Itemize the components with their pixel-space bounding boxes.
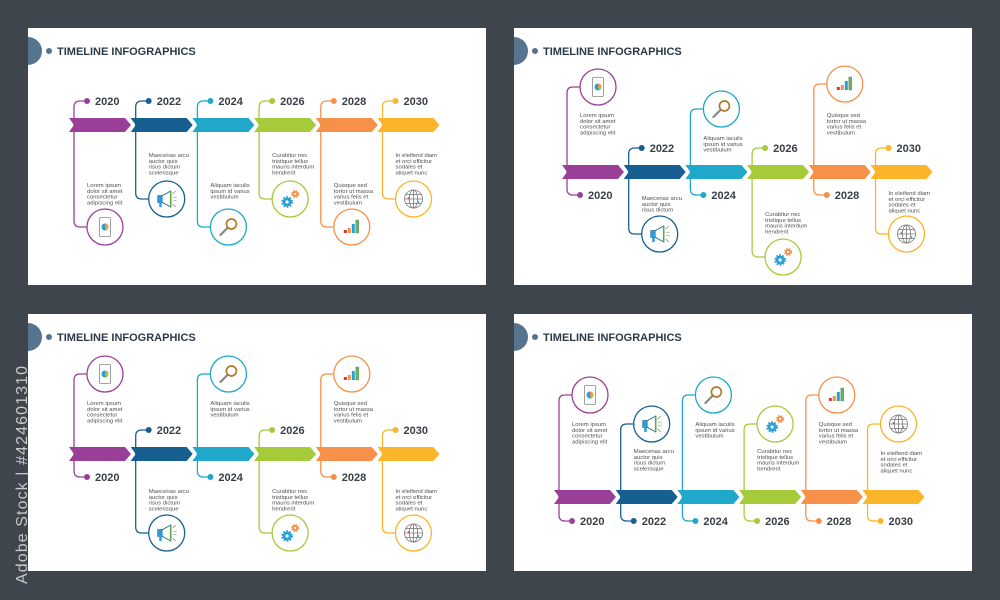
panel 1: all years above — [28, 28, 486, 285]
item 2022: Maecenas arcu — [149, 489, 189, 495]
item 2030: sodales et — [880, 463, 908, 469]
item 2022 — [616, 406, 678, 528]
item 2020: 2020 — [580, 516, 604, 528]
item 2030 — [870, 143, 932, 252]
item 2020: consectetur — [572, 434, 602, 440]
item 2028: varius felis et — [819, 434, 854, 440]
item 2028: vestibulum — [827, 130, 855, 136]
item 2030: aliquet nunc — [396, 170, 427, 176]
item 2022: auctor quis — [149, 495, 178, 501]
item 2028: vestibulum — [334, 418, 362, 424]
item 2020: Lorem ipsum — [580, 113, 614, 119]
item 2030: In eleifend diam — [880, 451, 922, 457]
item 2026: mauris interdum — [272, 165, 314, 171]
item 2024 — [677, 377, 739, 528]
item 2024: Aliquam iaculis — [703, 136, 743, 142]
item 2024: vestibulum — [695, 434, 724, 440]
item 2026 — [254, 425, 316, 551]
watermark: vertical stock id: Adobe Stock | #424601310 — [14, 366, 31, 584]
item 2022: scelerisque — [149, 506, 179, 512]
item 2028: tortor ut massa — [827, 119, 867, 125]
item 2022: auctor quis — [634, 455, 663, 461]
header 3: TIMELINE INFOGRAPHICS — [57, 332, 196, 344]
item 2020 — [562, 69, 624, 202]
item 2030: In eleifend diam — [888, 191, 930, 197]
item 2028: Quisque sed — [334, 183, 367, 189]
item 2022: 2022 — [157, 96, 181, 108]
panel 4: all years below — [514, 314, 972, 571]
item 2020: Lorem ipsum — [87, 401, 121, 407]
item 2026: hendrerit — [765, 229, 789, 235]
item 2022: risus dictum — [149, 501, 180, 507]
item 2030: sodales et — [396, 165, 423, 171]
item 2022 — [624, 143, 686, 252]
panel 3: alternating, aligned circles — [28, 314, 486, 571]
item 2026: tristique tellus — [757, 455, 793, 461]
item 2020: adipiscing elit — [87, 418, 123, 424]
item 2020: consectetur — [87, 413, 117, 419]
item 2026: Curabitur nec — [272, 153, 308, 159]
item 2020: consectetur — [87, 195, 117, 201]
item 2028 — [809, 66, 871, 202]
item 2028: vestibulum — [334, 200, 362, 206]
item 2026: mauris interdum — [272, 501, 314, 507]
item 2022: scelerisque — [634, 466, 664, 472]
item 2028: vestibulum — [819, 439, 847, 445]
item 2030: 2030 — [896, 143, 921, 155]
header 3 — [28, 323, 196, 351]
item 2028: 2028 — [827, 516, 851, 528]
item 2020: Lorem ipsum — [572, 422, 606, 428]
item 2024 — [192, 96, 254, 245]
item 2030: et orci efficitur — [396, 495, 432, 501]
item 2024: 2024 — [218, 96, 244, 108]
item 2022: 2022 — [157, 425, 181, 437]
item 2028: tortor ut massa — [334, 407, 374, 413]
header 4: TIMELINE INFOGRAPHICS — [543, 332, 682, 344]
item 2024: ipsum id varius — [695, 428, 735, 434]
item 2030: et orci efficitur — [880, 457, 917, 463]
item 2024: ipsum id varius — [210, 189, 250, 195]
header 2: TIMELINE INFOGRAPHICS — [543, 46, 682, 58]
item 2030: 2030 — [404, 425, 428, 437]
item 2020: adipiscing elit — [580, 130, 616, 136]
item 2024: ipsum id varius — [703, 142, 743, 148]
item 2024: vestibulum — [210, 195, 239, 201]
item 2026: Curabitur nec — [272, 489, 308, 495]
item 2026: mauris interdum — [765, 224, 807, 230]
item 2020: adipiscing elit — [87, 200, 123, 206]
item 2024: 2024 — [703, 516, 729, 528]
item 2026: hendrerit — [272, 170, 296, 176]
header 4 — [514, 323, 682, 351]
item 2028: 2028 — [342, 472, 366, 484]
item 2020: consectetur — [580, 125, 610, 131]
item 2030 — [378, 425, 440, 551]
item 2022: risus dictum — [634, 461, 665, 467]
item 2026: hendrerit — [272, 506, 296, 512]
item 2028 — [316, 356, 378, 484]
item 2030: In eleifend diam — [396, 489, 437, 495]
item 2026: Curabitur nec — [765, 212, 801, 218]
item 2022: Maecenas arcu — [149, 153, 189, 159]
item 2030: 2030 — [404, 96, 428, 108]
item 2020 — [554, 377, 616, 528]
item 2020: 2020 — [95, 472, 119, 484]
item 2028: tortor ut massa — [334, 189, 374, 195]
item 2028: Quisque sed — [819, 422, 852, 428]
item 2024: ipsum id varius — [210, 407, 250, 413]
item 2026: 2026 — [773, 143, 798, 155]
item 2020 — [69, 96, 131, 245]
item 2026: tristique tellus — [765, 218, 801, 224]
item 2020: 2020 — [588, 190, 612, 202]
panel 2: alternating, staggered circles — [514, 28, 972, 285]
item 2026 — [747, 143, 809, 275]
item 2030: aliquet nunc — [888, 208, 920, 214]
item 2026: tristique tellus — [272, 159, 308, 165]
item 2024: Aliquam iaculis — [695, 422, 735, 428]
item 2030: aliquet nunc — [880, 468, 912, 474]
item 2028: tortor ut massa — [819, 428, 859, 434]
item 2030 — [378, 96, 440, 217]
item 2026 — [739, 406, 801, 528]
item 2022: risus dictum — [149, 165, 180, 171]
item 2028: Quisque sed — [827, 113, 860, 119]
item 2022: Maecenas arcu — [634, 449, 674, 455]
item 2026: Curabitur nec — [757, 449, 793, 455]
item 2024 — [192, 356, 254, 484]
item 2028: varius felis et — [827, 125, 862, 131]
item 2020: dolor sit amet — [572, 428, 608, 434]
item 2022 — [131, 96, 193, 217]
item 2030: sodales et — [888, 203, 916, 209]
item 2026: hendrerit — [757, 466, 781, 472]
item 2026: mauris interdum — [757, 461, 799, 467]
item 2028: 2028 — [342, 96, 366, 108]
item 2022 — [131, 425, 193, 551]
item 2022: scelerisque — [149, 170, 179, 176]
item 2028: 2028 — [835, 190, 859, 202]
item 2024: vestibulum — [210, 413, 239, 419]
item 2020: adipiscing elit — [572, 439, 608, 445]
header 1: TIMELINE INFOGRAPHICS — [57, 46, 196, 58]
item 2030 — [862, 406, 924, 528]
item 2022: Maecenas arcu — [642, 196, 682, 202]
item 2030: sodales et — [396, 501, 423, 507]
item 2022: auctor quis — [149, 159, 178, 165]
item 2022: 2022 — [650, 143, 674, 155]
item 2022: risus dictum — [642, 208, 673, 214]
item 2028: varius felis et — [334, 195, 369, 201]
item 2030: et orci efficitur — [396, 159, 432, 165]
item 2026: 2026 — [280, 96, 305, 108]
item 2024: Aliquam iaculis — [210, 183, 250, 189]
item 2024: vestibulum — [703, 148, 732, 154]
item 2030: In eleifend diam — [396, 153, 437, 159]
item 2026: 2026 — [280, 425, 305, 437]
item 2020: dolor sit amet — [580, 119, 616, 125]
item 2020 — [69, 356, 131, 484]
item 2020: 2020 — [95, 96, 119, 108]
item 2026: 2026 — [765, 516, 790, 528]
item 2030: aliquet nunc — [396, 506, 427, 512]
item 2028: varius felis et — [334, 413, 369, 419]
item 2028 — [801, 377, 863, 528]
item 2024: 2024 — [218, 472, 244, 484]
header 2 — [514, 37, 682, 65]
item 2022: 2022 — [642, 516, 666, 528]
header 1 — [28, 37, 196, 65]
item 2020: dolor sit amet — [87, 189, 123, 195]
item 2020: Lorem ipsum — [87, 183, 121, 189]
item 2024: Aliquam iaculis — [210, 401, 250, 407]
item 2030: 2030 — [888, 516, 913, 528]
item 2026: tristique tellus — [272, 495, 308, 501]
item 2028: Quisque sed — [334, 401, 367, 407]
item 2022: auctor quis — [642, 202, 671, 208]
item 2026 — [254, 96, 316, 217]
item 2020: dolor sit amet — [87, 407, 123, 413]
item 2030: et orci efficitur — [888, 197, 925, 203]
item 2028 — [316, 96, 378, 245]
item 2024 — [685, 91, 747, 202]
item 2024: 2024 — [711, 190, 737, 202]
